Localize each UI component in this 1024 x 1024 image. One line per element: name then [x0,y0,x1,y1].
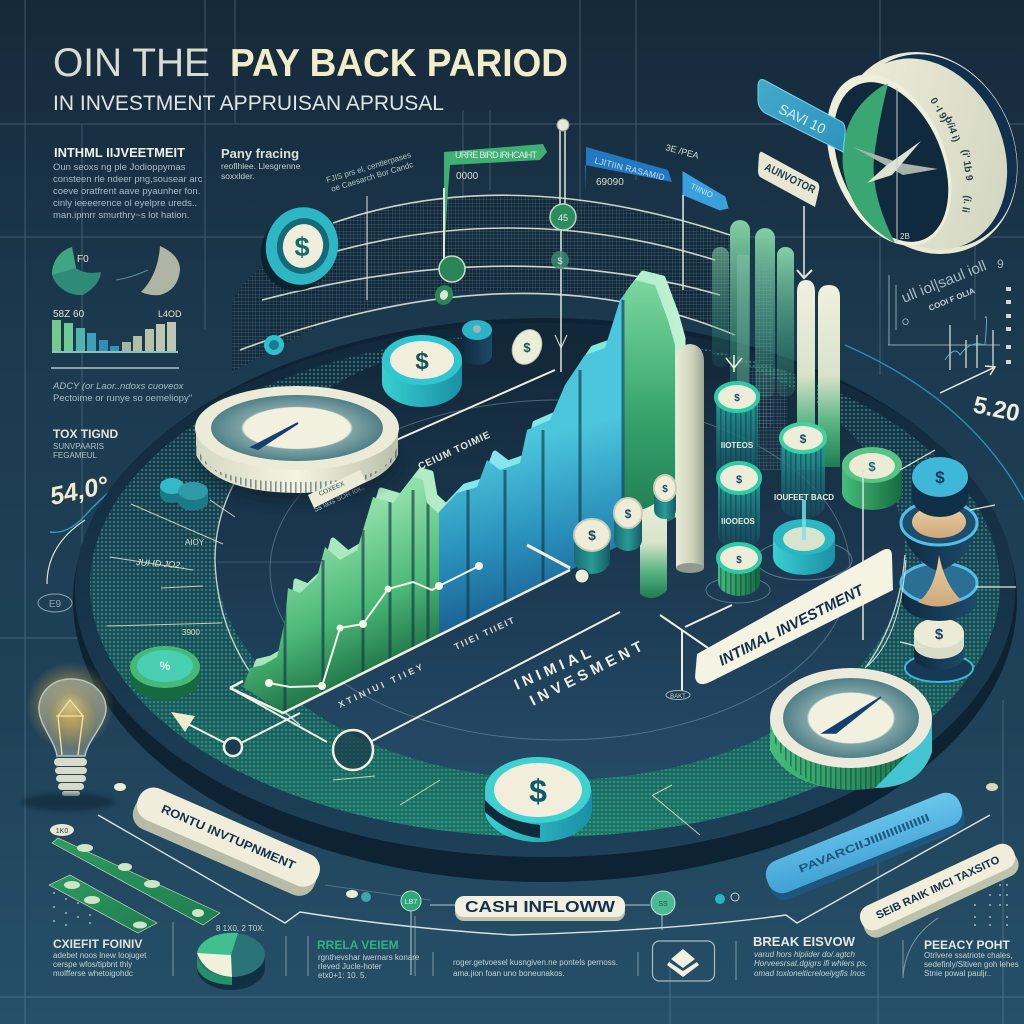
text block: peak point: PEEACY POHT [924,938,1010,952]
platform text labels: CEIUM TOIMIE [417,430,492,473]
inner radar arcs [217,400,850,740]
divider lines [173,916,938,980]
text block: payback tracing [221,146,301,181]
small stacked coins near chart [574,475,676,583]
text block: cash point: molfferse whetoigohdc [53,969,133,978]
cylinder label two: IOUFEET BACD [774,493,834,502]
bulb glow [26,662,114,750]
text block: tox tignd: FEGAMEUL [53,451,98,460]
coin stack three: $ [662,484,668,495]
main platform [73,318,1017,882]
ring dial: (i. li [959,194,973,214]
icon: diamond box [652,941,714,981]
bulb base [54,758,87,796]
text block: break even [753,934,867,978]
arrow and nodes [171,712,373,770]
title [53,41,568,115]
inner disc edge [215,400,905,725]
heading on platform: initial investment: INVESMENT [527,638,645,710]
3D pie bottom: 8 1X0, 2 T0X. [216,924,265,933]
text block: initial investment: coeve oratfrent aave pyaunher fon. [53,186,200,197]
mini chart right: O [902,317,909,327]
platform text labels: XTINIUI TIIEY [337,662,424,710]
text block: note: Pectoime or runye so oemeliopy" [53,393,192,404]
tilted coin: $ [523,340,531,355]
pill: blue [761,788,969,904]
base [905,654,973,682]
bulb filament [56,700,84,755]
money strip one [52,838,220,925]
ring labels: AIOY [185,538,205,547]
green short coin: $ [868,459,876,474]
chart flags: green flag [444,144,547,260]
dotted ring texture [90,333,1000,837]
text block: payback tracing: Pany fracing [221,146,299,161]
platform text labels: Ss Iaxs SOR Iox.. [313,484,366,514]
ring dial: 2B [900,232,910,241]
chart flags: light blue flag [683,172,728,290]
text block: tox tignd: TOX TIGND [53,427,118,441]
cylinder label one: IIOTEOS [721,441,754,450]
pill: intimal investment [695,549,893,684]
ring labels: 3900 [182,628,200,637]
text block: break even: varud hors hlpiider do/.agtch [754,950,856,959]
connector dots left: LB7 [405,899,417,906]
text block: break even: Horveesrsat.dgigrs ifi whlers ps, [754,959,867,968]
platform text labels [313,430,516,710]
text block: peak point: Stnie powal pauljr.. [924,969,991,978]
pill: initial investment left [128,782,325,901]
title: IN INVESTMENT APPRUISAN APRUSAL [53,92,444,115]
line chart overlay [265,562,483,690]
pie: green: F0 [77,254,89,265]
pie: beige [116,246,180,295]
text block: rrela veiem: rgnthevshar iwernars konare [318,953,420,962]
cream dot top-right of pills [986,783,998,791]
pill: intimal investment: INTIMAL INVESTMENT [716,581,868,670]
sign: savi 10: SAVI 10 [776,101,829,137]
small teal coins [160,478,208,511]
inner disc [215,330,905,780]
bar chart: small: L4OD [158,309,182,319]
note: 3e pea: 3E /PEA [664,142,700,161]
heading on platform: initial investment: INIMIAL [512,645,594,694]
mini chart right: ull iol|saul ioll [899,257,989,307]
arrow: sign to bar [797,206,812,278]
text block: initial investment [53,145,203,221]
pill: cream right [856,840,1023,942]
big number: 54.0: 54,0° [47,471,112,511]
hourglass stack [901,457,977,682]
text block: note [52,381,192,404]
cylinder two: $ [800,432,807,446]
cylinder three: $ [736,474,742,486]
green nodes on pole [432,188,465,307]
text block: cash point: CXIEFIT FOINIV [53,937,142,951]
pie: green [52,247,101,295]
small dark cylinder [462,320,492,365]
pill: cash inflow: CASH INFLOWW [465,899,616,916]
money strip two [49,875,157,933]
cylinder two [781,424,825,519]
text block: break even: omad toxloneiticreloelygfis Inos [754,969,865,978]
hourglass stack: $ [935,626,944,643]
platform rim [75,323,1015,857]
small cream dot [114,783,126,791]
badge: E9 [38,594,72,612]
text block: initial investment: cinly ieeeerence ol eyelpre ureds.. [53,198,197,209]
chart flags: blue flag: 69090 [596,177,624,188]
text block: rrela veiem: rleved Jucle-hoter [318,962,382,971]
bulb shadow [22,793,114,811]
coin: bottom center [485,757,592,842]
text block: payback tracing: soxxlder. [221,171,255,181]
text block: initial investment: consteen rle ndeer png,sousear arc [53,174,203,185]
curved mesh band [232,195,735,372]
cap [912,477,968,517]
text block: roger [453,958,618,978]
small tag [666,690,690,700]
text block: rrela veiem [317,938,420,980]
badge: strip: 1K0 [56,828,68,835]
coin: top center: $ [415,348,429,375]
bottom white curve [98,815,990,935]
column green-cream [640,488,667,598]
area chart: 3D green and blue ridges [235,270,679,720]
ring dial [802,22,1024,284]
hourglass stack: $ [935,468,945,487]
ring dial: 0 ·I 9) [927,96,950,124]
small rotated note: oe Caesarch Bor Candc [330,160,414,194]
coin stack one: $ [588,527,596,543]
chart flags: green flag: 0000 [456,171,479,182]
white rails [230,370,732,747]
text block: cash point [53,937,147,978]
ring tick lines [107,500,700,835]
text block: tox tignd [53,427,118,460]
green percent coin: % [160,659,171,673]
small tag: BAKT [670,694,686,700]
chart back ribbon [251,273,683,706]
pill: cream right: SEIB RAIK IMCI TAXSITO [874,854,1002,922]
cylinder four: teal ring [756,500,852,580]
cylinder one: $ [734,393,740,404]
pill: initial investment left: RONTU INVTUPNMENT [159,802,298,873]
text block: peak point: Otrlvere ssatriote chales, [924,951,1012,960]
small teal node [264,335,284,355]
text block: rrela veiem: RRELA VEIEM [317,938,399,952]
pill: cash inflow [455,896,625,921]
coin stack two: $ [625,507,632,521]
green short coin [842,447,902,640]
badge: strip [50,824,74,836]
3D pie bottom [197,924,265,990]
big teal coin [252,199,347,299]
text block: break even: BREAK EISVOW [753,934,856,949]
text block: rrela veiem: etx0+1: 10. 5. [318,971,367,980]
mini chart right: 9 [997,257,1004,271]
text block: note: ADCY (or Laor..ndoxs cuoveox [52,381,185,392]
upper bulb [902,523,976,570]
text block: initial investment: INTHML IIJVEETMEIT [54,145,185,160]
sign: aunvotor: AUNVOTOR [762,161,817,196]
ring dial: b/i4 i) [942,115,961,144]
cylinder three [718,463,760,549]
gauge tag: COXEEX [318,480,346,498]
tall translucent bars [712,220,794,428]
text block: initial investment: Oun seoxs ng ple Jodioppymas [53,162,186,173]
accent curve right [845,345,1024,500]
connector dots right [625,891,739,930]
cream coin [914,636,964,670]
chart flags: blue flag [585,147,672,192]
cream column [676,344,704,573]
text block: roger: roger.getvoesel kusngiven.ne pontels pernoss. [453,958,618,967]
chart flags: light blue flag: TIINIO [689,182,714,200]
text block: initial investment: man.ipmrr smurthry~s lot hation. [53,210,189,221]
text block: roger: ama.jion foan uno boneunakos. [453,969,565,978]
accent curves left [47,390,250,584]
text block: cash point: cerspe wfos/tipbnt thly [53,960,132,969]
lower sand [918,555,961,607]
title: PAY BACK PARIOD [230,42,568,85]
green percent coin [130,646,200,700]
mini chart right [888,257,1011,370]
dotted ring base [90,333,1000,837]
mini chart right: COOI F OLIA [927,286,976,313]
text block: tox tignd: SUNVPAARIS [53,442,104,451]
cylinder five: $ [736,555,742,566]
chart flags: green flag: URRE BIRD IRHCAIHT [455,150,538,160]
platform text labels: TIIEI TIIEIT [453,615,516,652]
cylinder one [716,383,758,484]
coin: top center [382,335,462,407]
central pole with nodes [550,119,576,372]
text block: payback tracing: reoflhlee. Llesgrenne [221,161,301,171]
chart flags: blue flag: LJITIIN RASAMID [594,155,666,182]
lower bulb [902,583,976,621]
sign: savi 10 [758,80,845,152]
lightbulb [26,662,114,796]
cylinder five [706,544,770,603]
platform side [73,318,1017,882]
coin: bottom center: $ [529,773,547,809]
gauge: bottom right [770,560,932,790]
sign: aunvotor [758,152,819,207]
hourglass leader lines [900,450,1016,648]
dot grids [53,884,1008,926]
gauge: left [195,386,399,502]
big teal coin: $ [294,232,310,262]
pill: blue: PAVARCIIJIIIIIIIIIIIIIII [797,812,932,876]
small rotated note: FJIS prs el, centlerpases [325,150,412,185]
chart baseline frame [230,570,570,713]
gauge tag [308,470,366,508]
arrow: right trend [940,366,995,393]
connector dots right: SS [658,901,668,908]
cream-to-green columns [750,280,840,470]
bar chart: small [51,309,182,369]
bar chart: small: 58Z 60 [53,309,85,320]
ring labels: JUI ID JO2.. [135,557,185,570]
bulb glass [39,679,106,756]
text block: cash point: adebet noos lnew Ioojuget [53,951,147,960]
text block: peak point: sedefinly/Sltiven goh lehes [924,960,1019,969]
cylinder label three: IIOOEOS [721,517,756,526]
tilted coin [507,325,547,369]
badge: E9: E9 [49,599,62,610]
ring dial: (i' 1b 9 [959,149,974,182]
big number: 5.20: 5.20 [971,391,1022,428]
title: OIN THE [53,41,210,85]
central pole with nodes: 45 [558,213,568,223]
central pole with nodes: $ [557,256,563,266]
connector dots left [325,885,455,975]
ring labels [135,538,205,637]
text block: peak point [924,938,1019,978]
pole line left [366,196,368,300]
